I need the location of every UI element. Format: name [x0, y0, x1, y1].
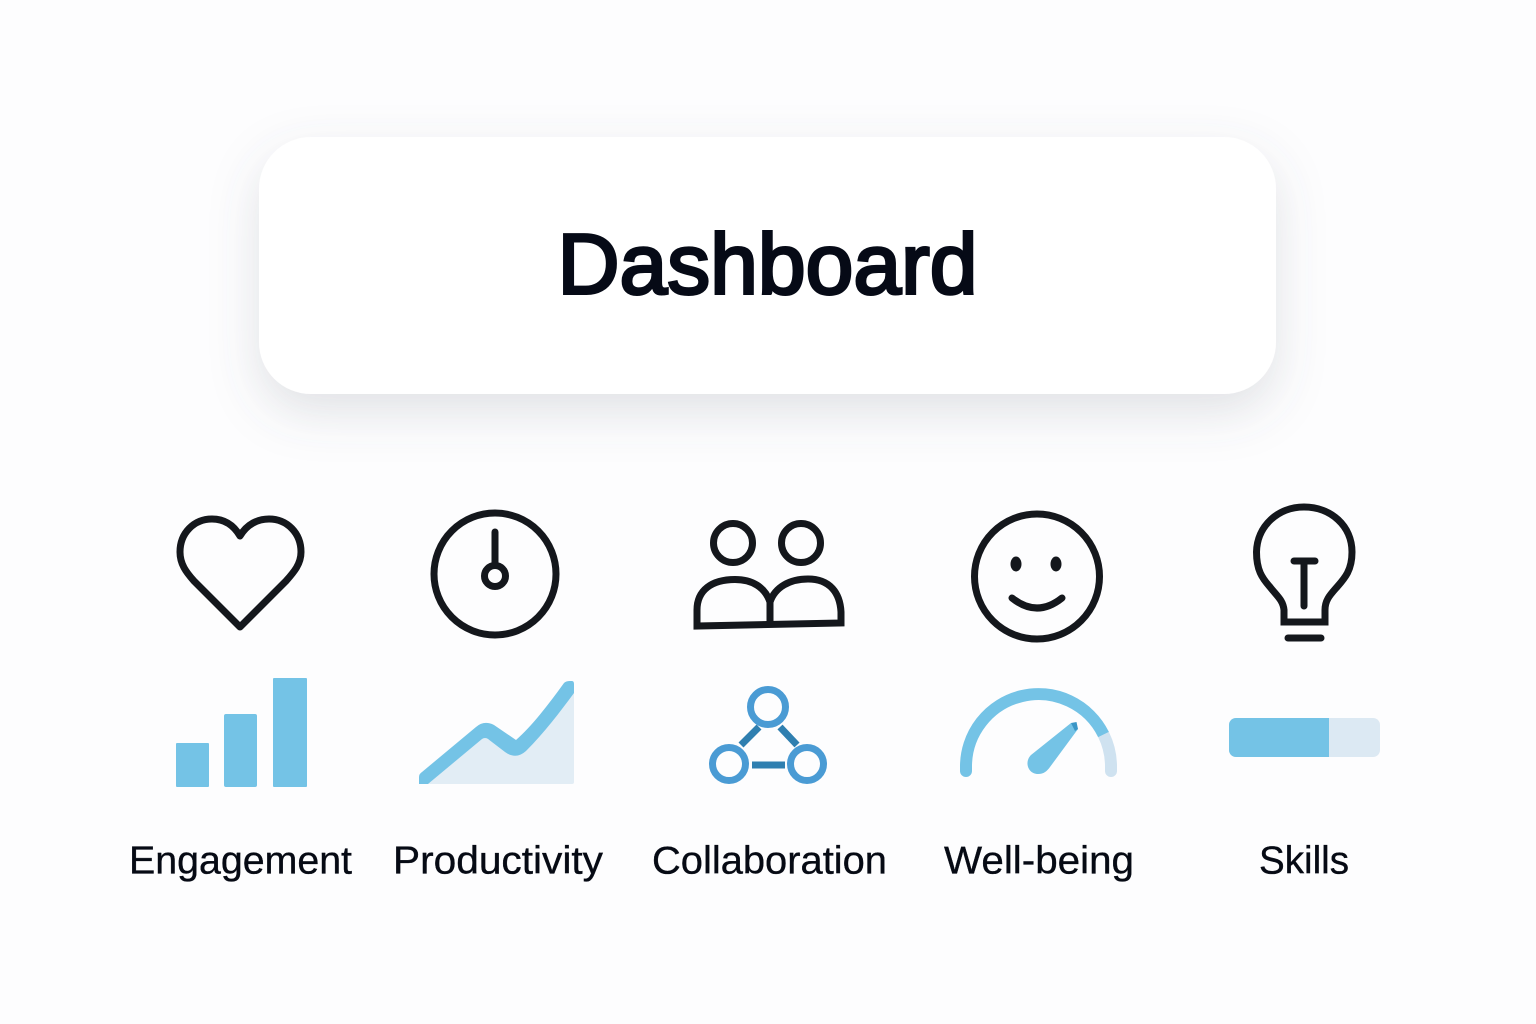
label: Productivity: Productivity [393, 840, 604, 882]
chart: bar chart icon [176, 678, 307, 787]
title: Dashboard [558, 218, 978, 312]
chart: progress bar [1229, 718, 1380, 757]
icon: clock dial [434, 513, 556, 635]
label: Skills: Skills [1259, 840, 1349, 882]
icon: smiley [974, 514, 1100, 639]
label: Well-being: Well-being [944, 840, 1134, 882]
panel: title card [259, 137, 1276, 394]
icon: two people [697, 524, 841, 626]
icon: collaboration network [712, 690, 824, 780]
label: Engagement: Engagement [129, 840, 352, 882]
label: Collaboration: Collaboration [652, 840, 887, 882]
icon: gauge [960, 694, 1111, 777]
chart: area line icon [419, 681, 574, 784]
icon: light bulb [1256, 507, 1352, 638]
icon: heart [180, 519, 301, 627]
